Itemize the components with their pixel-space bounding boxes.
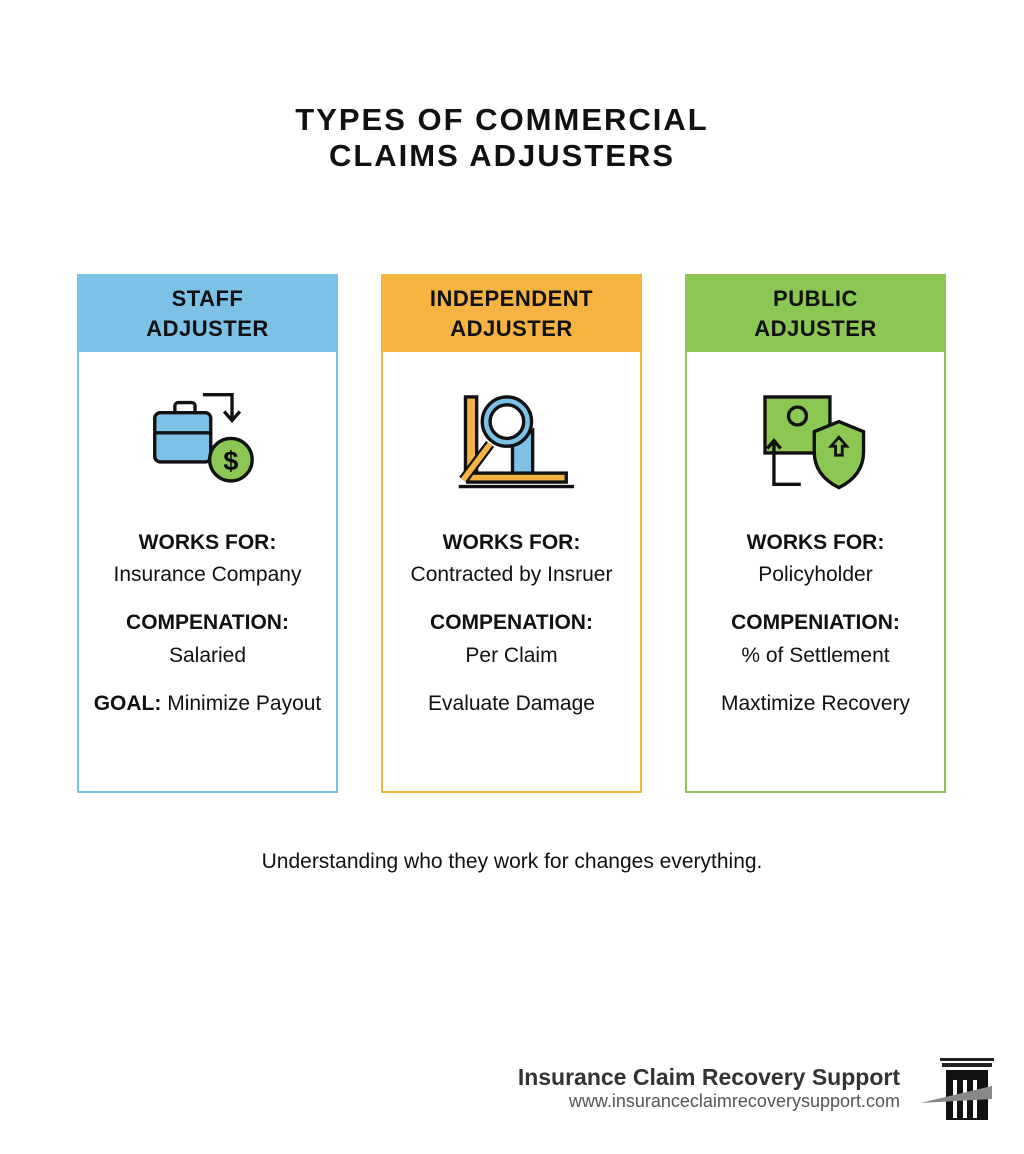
panel: staff adjuster: COMPENATION: [126,611,289,634]
panel: public adjuster: COMPENIATION: [731,611,900,634]
panel: public adjuster: WORKS FOR: [747,531,884,554]
header: independent: INDEPENDENT [430,286,593,311]
panel: public adjuster [685,274,946,793]
text: public details [721,531,910,715]
brand text [518,1064,900,1111]
panel: independent adjuster: Evaluate Damage [428,692,595,715]
panel: independent adjuster: COMPENATION: [430,611,593,634]
panel: independent adjuster [381,274,642,793]
panel: staff adjuster: WORKS FOR: [139,531,276,554]
header: independent: ADJUSTER [450,316,573,341]
header: public: PUBLIC [773,286,858,311]
text: staff details [94,531,322,715]
panel: public adjuster: % of Settlement [741,644,890,667]
brand text: Insurance Claim Recovery Support [518,1064,900,1090]
header: staff: ADJUSTER [146,316,269,341]
panel: independent adjuster: Contracted by Insruer [411,563,612,586]
icon: pillar logo [920,1058,994,1120]
branding [518,1058,994,1120]
header: public [687,276,944,352]
title: CLAIMS ADJUSTERS [329,138,675,173]
brand text: www.insuranceclaimrecoverysupport.com [569,1091,900,1111]
icon: magnifier over damage [458,395,574,488]
panel: independent adjuster: Per Claim [465,644,558,667]
footer note: Understanding who they work for changes everything. [262,850,762,873]
header: staff [79,276,336,352]
header: independent [383,276,640,352]
icon: money with shield [763,395,866,490]
header: staff: STAFF [172,286,243,311]
icon: briefcase with dollar [153,393,254,483]
header: public: ADJUSTER [754,316,877,341]
title: TYPES OF COMMERCIAL [295,102,709,137]
panel: staff adjuster: GOAL: Minimize Payout [94,692,321,715]
panel: public adjuster: Maxtimize Recovery [721,692,910,715]
panel: staff adjuster [77,274,338,793]
text: independent details [411,531,612,715]
icon: briefcase with dollar: $ [223,446,238,476]
panel: public adjuster: Policyholder [758,563,873,586]
panel: independent adjuster: WORKS FOR: [443,531,580,554]
title [295,102,709,173]
panel: staff adjuster: Insurance Company [114,563,301,586]
panel: staff adjuster: Salaried [169,644,246,667]
